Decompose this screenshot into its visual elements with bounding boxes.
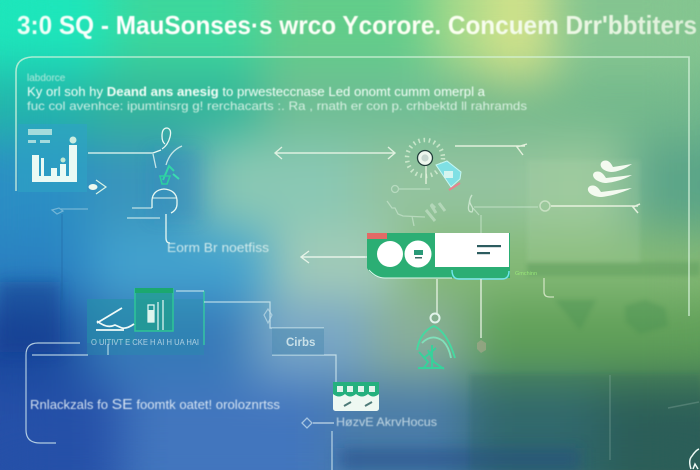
- intro panel outline: [16, 57, 689, 316]
- shape: faded dark blotch: [555, 300, 668, 334]
- icon: activity card: [333, 382, 379, 411]
- icon: corner emblem: [690, 449, 699, 469]
- intro text block: Ky orl soh hy Deand ans anesig to prwesteccnase Led onomt cumm omerpl a: [27, 85, 485, 99]
- line: right squiggle: [544, 278, 554, 297]
- arrow: double headed: [275, 147, 395, 159]
- intro text block: [27, 73, 527, 113]
- label: active activities: HøzvE AkrvHocus: [336, 415, 437, 429]
- arrow: to status card: [301, 251, 365, 263]
- icon: swoosh marks: [588, 160, 632, 197]
- icon: process figure: [127, 128, 182, 243]
- panel: chart tiles: [87, 288, 204, 355]
- icon: small diamond node: [477, 340, 486, 353]
- icon: radiant sensor with tag: [407, 140, 461, 190]
- connectors: below card: [437, 279, 481, 338]
- label: chips box: Cirbs: [286, 337, 315, 349]
- arrow: swoosh to node: [540, 201, 640, 213]
- icon: bar chart card: [18, 124, 87, 192]
- arrow: sensor right: [455, 144, 527, 155]
- chart caption: O UITIVT E CKE H AI H UA HAI: [91, 338, 199, 347]
- icon: chevron marker: [264, 309, 272, 323]
- label: process notes: Eorm Br noetfiss: [167, 241, 269, 255]
- panel: status card: [350, 233, 510, 279]
- label: chips box: [272, 328, 324, 355]
- icon: faded circuit cluster: [387, 186, 538, 233]
- icon: faded pin: [52, 208, 88, 300]
- text: process statement: Rnlackzals fo SE foomtk oatet! oroloznrtss: [30, 396, 280, 413]
- faint right lines: [610, 375, 699, 460]
- diamond node with connector: [302, 418, 334, 428]
- icon: small eye arrow: [88, 180, 106, 194]
- intro text block: fuc col avenhce: ipumtinsrg g! rerchacarts :. Ra , rnath er con p. crhbektd ll rahramds: [27, 99, 527, 113]
- intro text block: labdorce: [27, 73, 66, 84]
- connector: chart to figure: [88, 150, 161, 153]
- small green note: Gmchinn: [515, 271, 537, 277]
- connector lines: lower network: [26, 291, 336, 470]
- icon: green figure: [417, 314, 455, 369]
